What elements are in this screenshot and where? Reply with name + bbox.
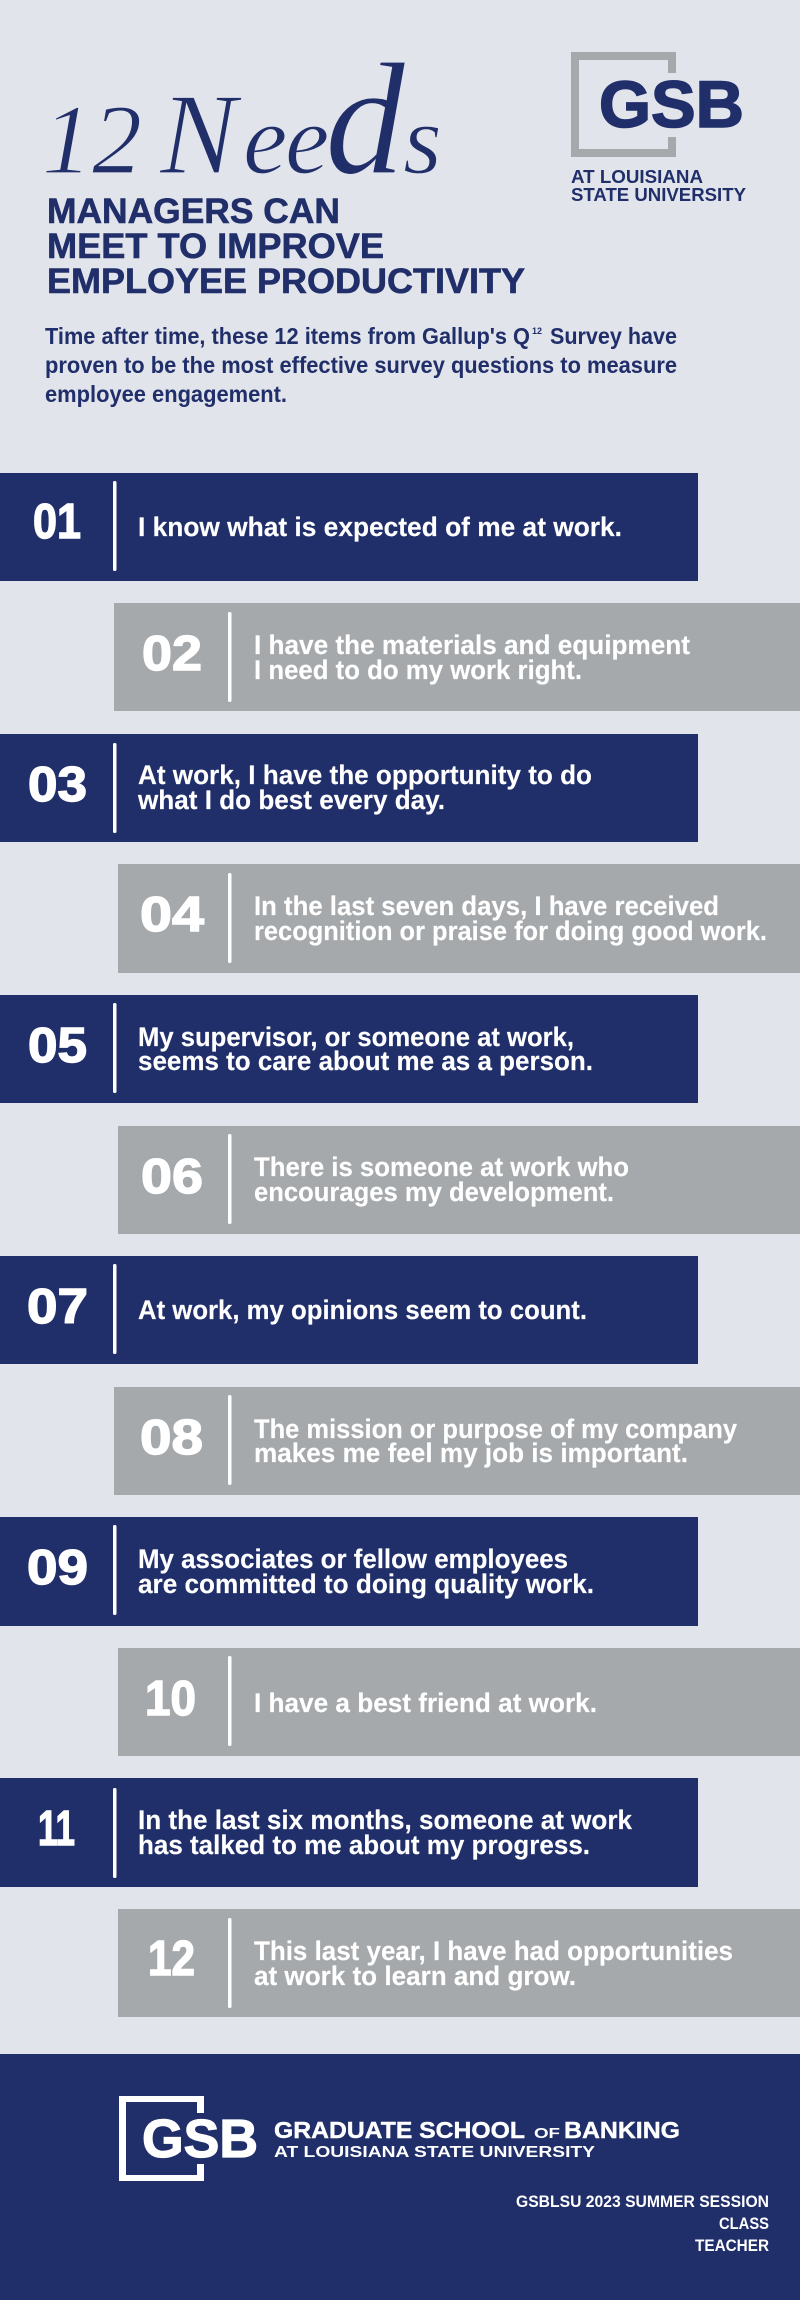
item 11: has talked to me about my progress. — [138, 1830, 590, 1860]
item 03: 03 — [28, 758, 87, 812]
logo: GSB at Louisiana State University: GSB — [599, 67, 744, 141]
item 02: I need to do my work right. — [254, 655, 582, 685]
item 11 — [0, 1778, 698, 1887]
item 07: 07 — [27, 1280, 88, 1334]
item 05: seems to care about me as a person. — [138, 1046, 593, 1076]
intro paragraph: Survey have — [550, 323, 677, 349]
heading: managers can meet to improve employee productivity: MEET TO IMPROVE — [47, 227, 384, 266]
item 06: 06 — [141, 1150, 203, 1204]
item 08: The mission or purpose of my company — [254, 1414, 737, 1444]
footer logo: GSB Graduate School of Banking: GRADUATE SCHOOL — [274, 2117, 525, 2143]
item 03: At work, I have the opportunity to do — [138, 760, 592, 790]
item 09: My associates or fellow employees — [138, 1544, 568, 1574]
item 05 — [0, 995, 698, 1103]
item 06: There is someone at work who — [254, 1152, 629, 1182]
item 02: 02 — [142, 627, 202, 681]
title: 12 Needs script: e — [243, 84, 287, 195]
footer session text: TEACHER — [695, 2236, 769, 2255]
item 06: encourages my development. — [254, 1177, 614, 1207]
item 07 — [0, 1256, 698, 1364]
item 02 — [114, 603, 800, 711]
logo: GSB at Louisiana State University: AT LOUISIANA — [571, 167, 703, 187]
item 11: 11 — [38, 1802, 75, 1856]
heading: managers can meet to improve employee productivity: EMPLOYEE PRODUCTIVITY — [47, 262, 525, 301]
item 08: 08 — [140, 1411, 203, 1465]
footer logo: GSB Graduate School of Banking — [119, 2096, 680, 2181]
item 12: This last year, I have had opportunities — [254, 1936, 733, 1966]
item 03: what I do best every day. — [137, 785, 445, 815]
item 08 — [114, 1387, 800, 1495]
intro paragraph — [45, 323, 677, 407]
item 10: I have a best friend at work. — [254, 1688, 597, 1718]
title: 12 Needs script: N — [159, 71, 243, 198]
footer logo: GSB Graduate School of Banking: GSB — [142, 2109, 258, 2169]
item 01: 01 — [33, 495, 81, 549]
item 04: recognition or praise for doing good work. — [254, 916, 767, 946]
item 05: My supervisor, or someone at work, — [138, 1022, 574, 1052]
item 07: At work, my opinions seem to count. — [138, 1295, 587, 1325]
footer panel — [0, 2054, 800, 2300]
heading: managers can meet to improve employee productivity — [47, 192, 525, 301]
heading: managers can meet to improve employee productivity: MANAGERS CAN — [47, 192, 340, 231]
item 04 — [118, 864, 800, 973]
footer logo: GSB Graduate School of Banking: BANKING — [564, 2117, 680, 2143]
item 02: I have the materials and equipment — [254, 630, 690, 660]
logo: GSB at Louisiana State University: STATE UNIVERSITY — [571, 185, 746, 205]
footer session text — [516, 2192, 769, 2255]
item 04: In the last seven days, I have received — [254, 891, 719, 921]
title: 12 Needs script — [42, 30, 442, 208]
item 10 — [118, 1648, 800, 1756]
item 12: 12 — [148, 1932, 195, 1986]
item 12 — [118, 1909, 800, 2017]
intro paragraph: employee engagement. — [45, 381, 287, 407]
item 09 — [0, 1517, 698, 1626]
item 08: makes me feel my job is important. — [254, 1438, 688, 1468]
item 06 — [118, 1126, 800, 1234]
title: 12 Needs script: s — [403, 84, 442, 195]
item 01: I know what is expected of me at work. — [138, 512, 622, 542]
title: 12 Needs script: e — [285, 84, 329, 195]
footer logo: GSB Graduate School of Banking: OF — [534, 2125, 560, 2142]
logo: GSB at Louisiana State University — [571, 52, 746, 205]
title: 12 Needs script: d — [325, 30, 406, 208]
footer session text: GSBLSU 2023 SUMMER SESSION — [516, 2192, 769, 2211]
intro paragraph: proven to be the most effective survey questions to measure — [45, 352, 677, 378]
item 03 — [0, 734, 698, 842]
title: 12 Needs script: 12 — [42, 84, 142, 195]
item 12: at work to learn and grow. — [254, 1961, 576, 1991]
item 10: 10 — [145, 1672, 196, 1726]
item 01 — [0, 473, 698, 581]
item 05: 05 — [28, 1019, 87, 1073]
item 11: In the last six months, someone at work — [138, 1805, 632, 1835]
item 09: 09 — [27, 1541, 88, 1595]
intro paragraph: 12 — [532, 326, 542, 336]
footer logo: GSB Graduate School of Banking: AT LOUISIANA STATE UNIVERSITY — [274, 2144, 595, 2161]
item 09: are committed to doing quality work. — [138, 1569, 594, 1599]
item 04: 04 — [140, 888, 204, 942]
intro paragraph: Time after time, these 12 items from Gallup's Q — [45, 323, 530, 349]
footer session text: CLASS — [719, 2214, 769, 2233]
